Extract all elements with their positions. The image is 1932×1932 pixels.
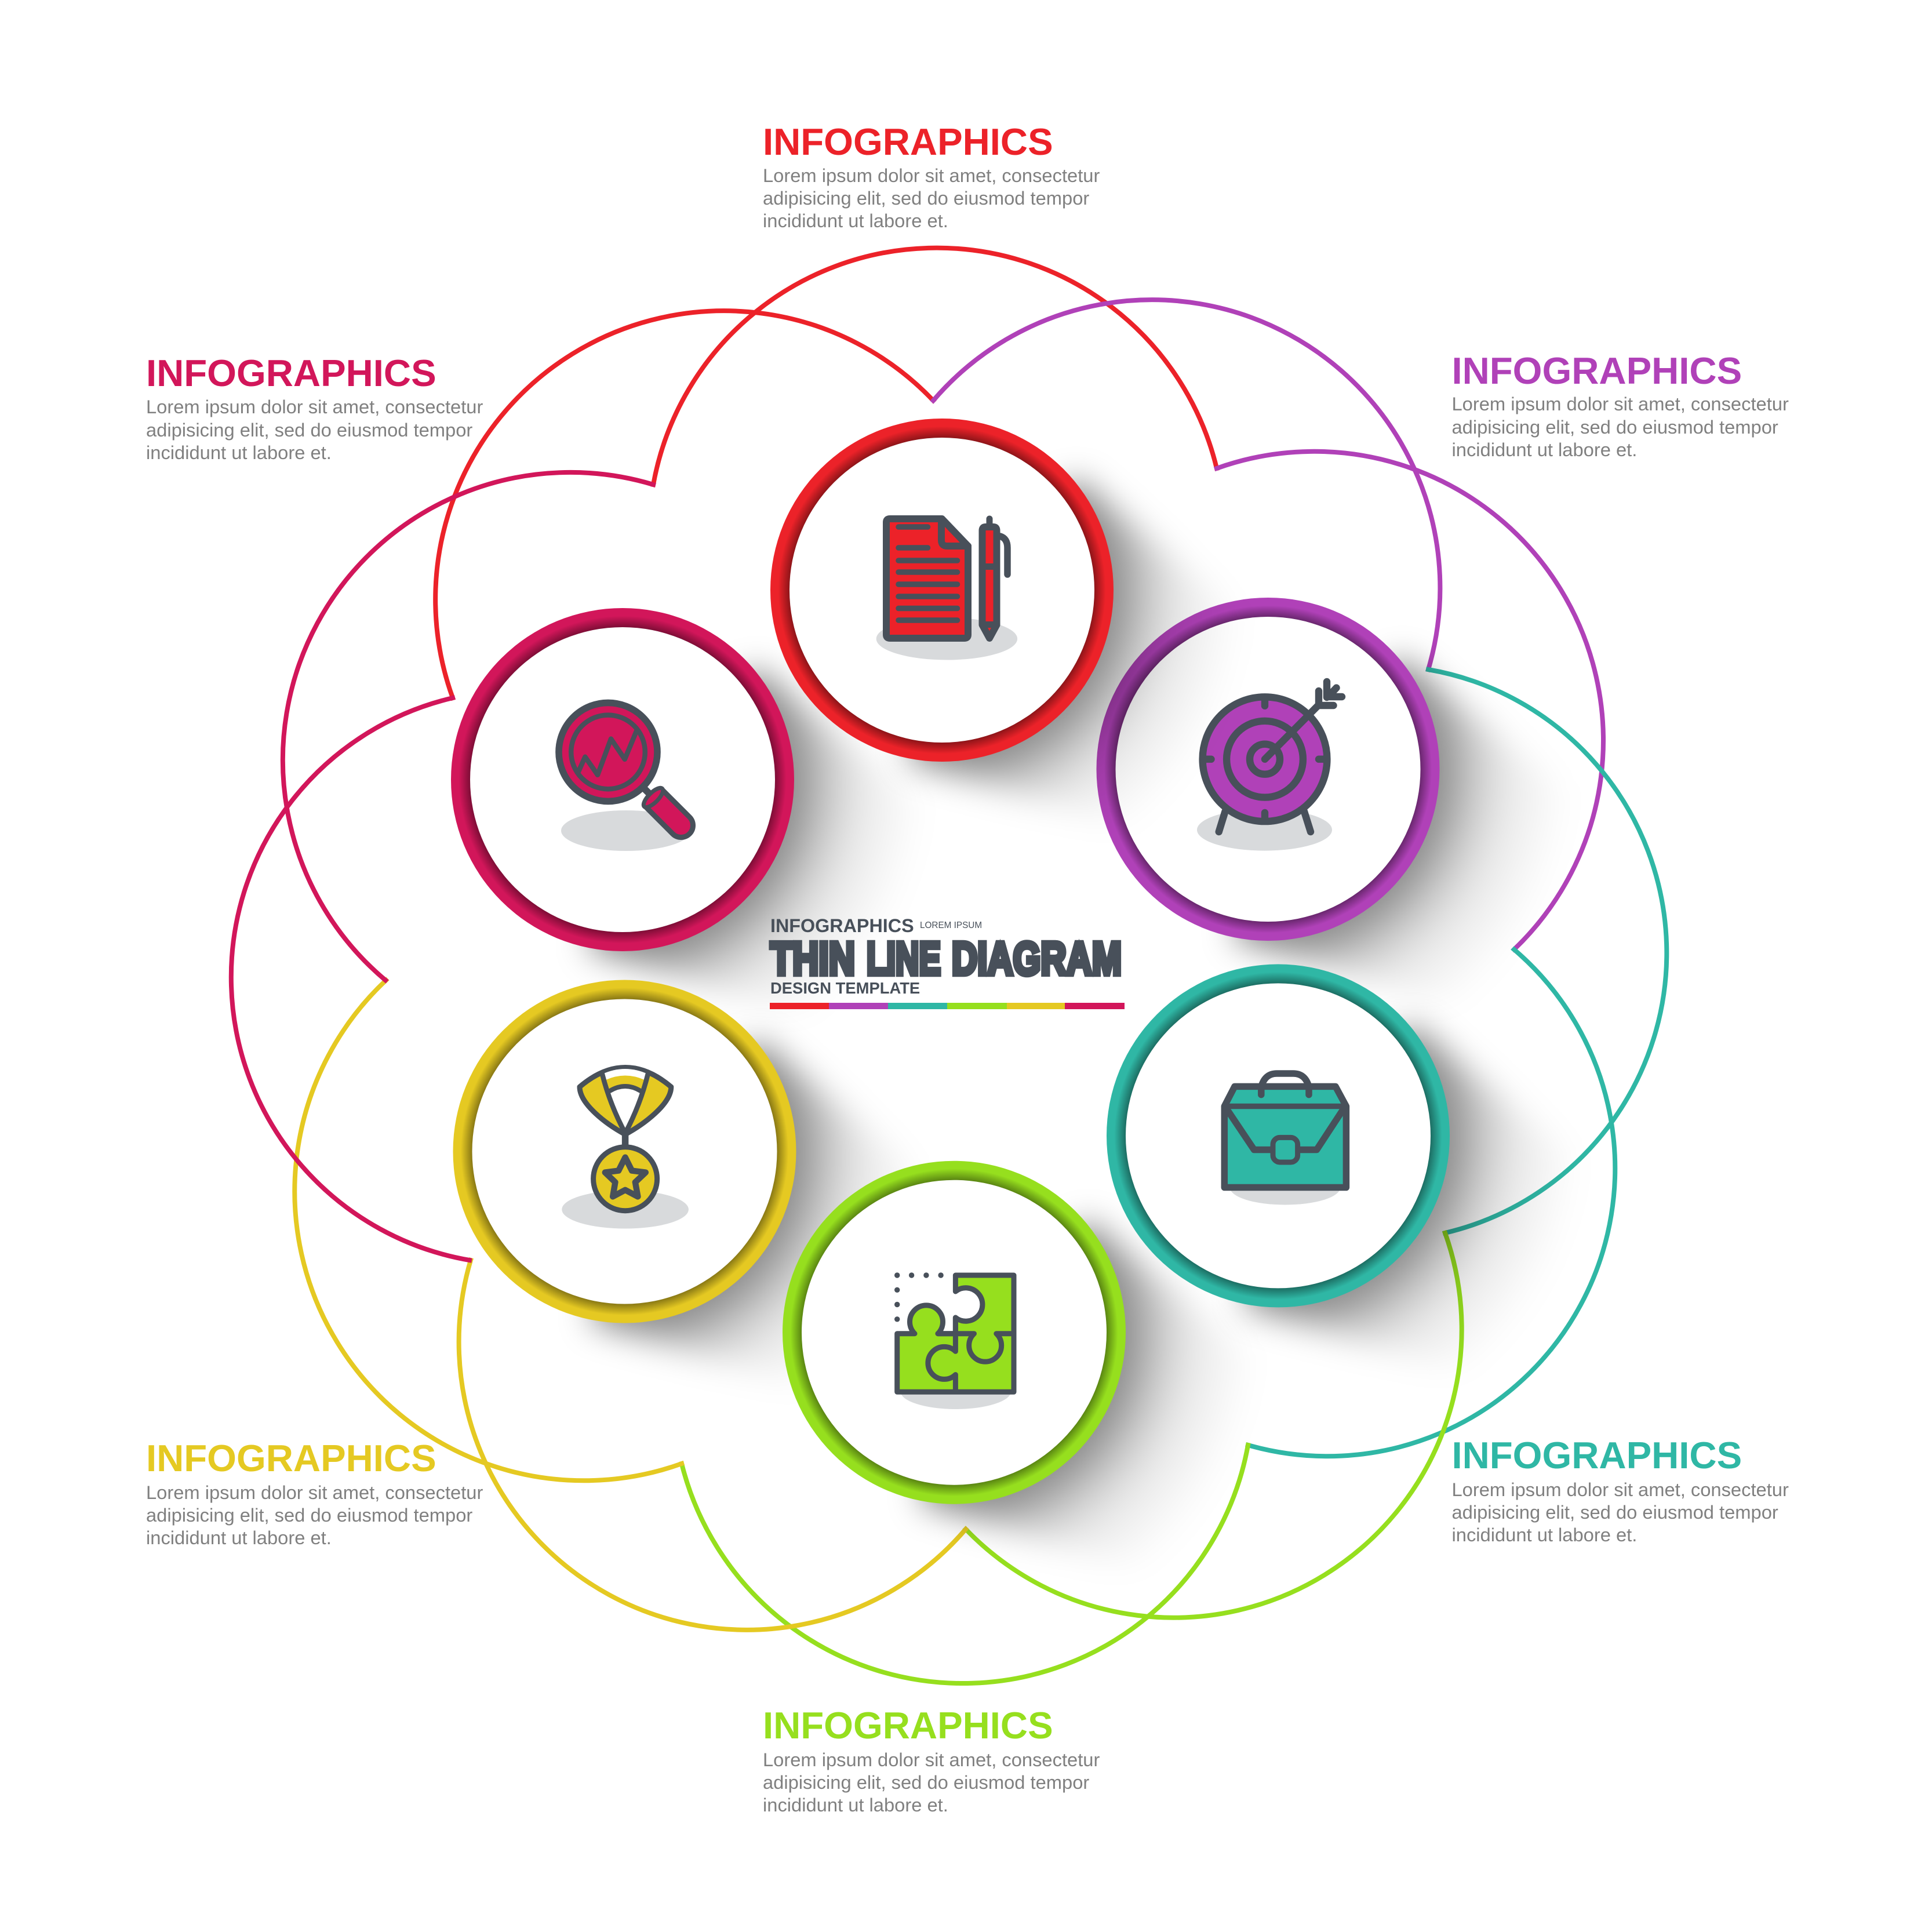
heading: INFOGRAPHICS [146,352,436,394]
panel: magenta circle with magnifier icon [451,608,989,1055]
body text: adipisicing elit, sed do eiusmod tempor [763,1771,1089,1793]
title: THIN LINE DIAGRAM: THIN [770,933,855,984]
body text: Lorem ipsum dolor sit amet, consectetur [146,396,483,417]
icon: briefcase [1224,1074,1346,1205]
body text: Lorem ipsum dolor sit amet, consectetur [1451,393,1789,414]
body text: incididunt ut labore et. [763,1794,948,1815]
body text: adipisicing elit, sed do eiusmod tempor [146,419,472,441]
petal arcs: red [435,248,1217,698]
petal arcs: green [682,1233,1462,1683]
panel: red circle with document and pen icon [770,419,1308,865]
text block: red top [763,121,1100,231]
body text: adipisicing elit, sed do eiusmod tempor [1451,416,1778,438]
icon: medal [562,1068,689,1229]
heading: INFOGRAPHICS [146,1437,436,1479]
panel: green circle with puzzle icon [783,1161,1320,1608]
petal arcs: teal [1248,670,1667,1456]
colour bar [770,1003,1125,1009]
text block: purple right [1451,350,1789,460]
title: THIN LINE DIAGRAM [770,933,1122,984]
title: INFOGRAPHICS small: INFOGRAPHICS [770,915,914,936]
text block: yellow left [146,1437,483,1548]
petal arcs: purple [933,300,1603,949]
body text: Lorem ipsum dolor sit amet, consectetur [763,1749,1100,1770]
title: THIN LINE DIAGRAM: DIAGRAM [952,933,1122,984]
centre title block [770,915,1125,1009]
title: THIN LINE DIAGRAM: LINE [867,933,941,984]
subtitle: DESIGN TEMPLATE: DESIGN TEMPLATE [770,979,920,997]
body text: incididunt ut labore et. [763,210,948,231]
heading: INFOGRAPHICS [1451,350,1742,392]
panel: teal circle with briefcase icon [1107,964,1644,1411]
body text: Lorem ipsum dolor sit amet, consectetur [1451,1479,1789,1500]
heading: INFOGRAPHICS [763,1704,1053,1747]
heading: INFOGRAPHICS [1451,1434,1742,1476]
text block: magenta left [146,352,483,463]
panel: yellow circle with medal icon [453,980,991,1427]
petal arcs: yellow [294,980,966,1630]
body text: Lorem ipsum dolor sit amet, consectetur [763,165,1100,186]
body text: adipisicing elit, sed do eiusmod tempor [763,187,1089,209]
icon: target with arrow [1197,682,1342,851]
petal arcs: magenta [231,472,653,1260]
text block: green bottom [763,1704,1100,1815]
icon: document and pen [876,519,1017,660]
body text: incididunt ut labore et. [1451,439,1637,460]
label: LOREM IPSUM: LOREM IPSUM [920,920,982,930]
body text: incididunt ut labore et. [146,442,332,463]
body text: Lorem ipsum dolor sit amet, consectetur [146,1482,483,1503]
text block: teal right [1451,1434,1789,1545]
panel: purple circle with target icon [1097,598,1635,1045]
body text: incididunt ut labore et. [146,1527,332,1548]
body text: adipisicing elit, sed do eiusmod tempor [1451,1501,1778,1523]
icon: puzzle [894,1272,1014,1409]
flower outline: thin line petals [231,248,1667,1683]
body text: incididunt ut labore et. [1451,1524,1637,1545]
body text: adipisicing elit, sed do eiusmod tempor [146,1504,472,1526]
heading: INFOGRAPHICS [763,121,1053,163]
icon: magnifier with chart [559,703,693,851]
